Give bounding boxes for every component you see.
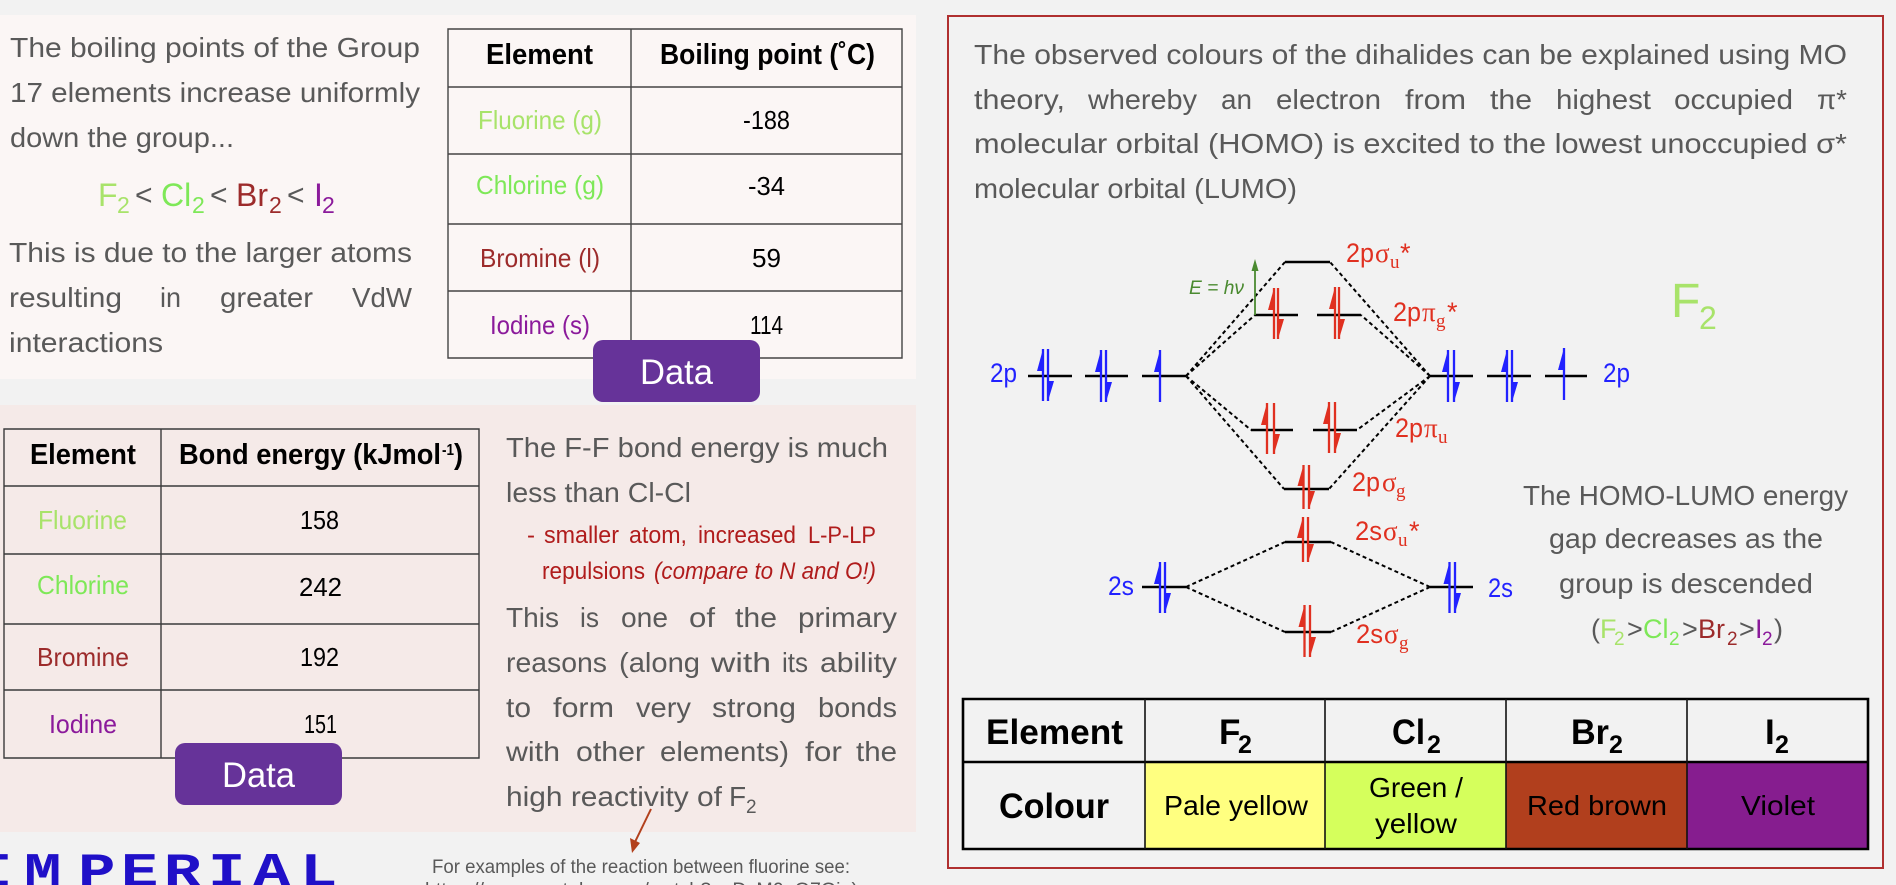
text: high reactivity reasons: elements) <box>660 736 789 767</box>
text: repulsion note: increased <box>698 522 796 549</box>
text: high reactivity reasons: with <box>505 736 560 767</box>
labels: molecular orbitals: 2p <box>1352 467 1380 497</box>
text: high reactivity reasons: bonds <box>818 692 897 723</box>
labels: molecular orbitals: * <box>1400 238 1411 268</box>
text: VdW explanation <box>9 237 413 358</box>
labels: molecular orbitals <box>1346 238 1458 654</box>
text: high reactivity reasons: strong <box>712 692 796 723</box>
labels: molecular orbitals: g <box>1396 481 1406 502</box>
arrow: excitation <box>1189 259 1258 315</box>
labels: molecular orbitals: π <box>1424 413 1438 443</box>
labels: molecular orbitals: u <box>1390 252 1400 273</box>
table: bond energies <box>4 429 479 758</box>
text: HOMO-LUMO gap: The HOMO-LUMO energy <box>1523 480 1848 511</box>
text: high reactivity reasons: F <box>729 781 746 812</box>
text: MO explanation: π* <box>1817 84 1847 115</box>
text: HOMO-LUMO gap: gap decreases as the <box>1549 523 1823 554</box>
text: HOMO-LUMO gap: > <box>1739 614 1755 644</box>
table: boiling points: Fluorine (g) <box>478 105 602 135</box>
correlation lines <box>1186 262 1430 632</box>
chart: MO diagram for F2 <box>990 238 1630 657</box>
table: boiling points: Element <box>486 39 593 71</box>
text: video reference: For examples of the reaction between fluorine see: <box>432 857 850 878</box>
table: boiling points: Iodine (s) <box>490 310 590 340</box>
text: MO explanation: molecular orbital (LUMO) <box>974 173 1297 204</box>
text: MO explanation: the <box>1490 84 1532 115</box>
table: dihalide colours: F <box>1219 713 1240 752</box>
table: dihalide colours: 2 <box>1775 731 1789 759</box>
text: HOMO-LUMO gap: > <box>1627 614 1643 644</box>
text: MO explanation: molecular orbital (HOMO) is excited to the lowest unoccupied σ* <box>974 128 1847 159</box>
table: boiling points: -188 <box>743 105 790 135</box>
text: repulsion note: smaller <box>544 522 619 549</box>
text: boiling point trend <box>10 32 420 153</box>
arrow: to video link <box>630 809 651 853</box>
text: MO explanation <box>974 39 1847 204</box>
table: bond energies: Bromine <box>37 642 129 672</box>
red electrons <box>1261 287 1345 657</box>
button: data (boiling points): Data <box>640 353 714 392</box>
formula: boiling point order: Br <box>236 177 268 213</box>
table: bond energies: -1 <box>442 442 454 459</box>
text: high reactivity reasons <box>505 602 897 818</box>
text: high reactivity reasons: high reactivity of <box>506 781 722 812</box>
text: MO explanation: an <box>1221 84 1252 115</box>
formula: boiling point order: 2 <box>192 192 205 218</box>
text: HOMO-LUMO gap: group is descended <box>1559 568 1813 599</box>
table: boiling points <box>448 29 902 358</box>
table: dihalide colours: Violet <box>1741 790 1815 821</box>
labels: molecular orbitals: π <box>1422 297 1436 327</box>
panel: bond energy <box>0 405 916 832</box>
labels: molecular orbitals: σ <box>1383 516 1398 546</box>
table: dihalide colours: 2 <box>1238 731 1252 759</box>
text: high reactivity reasons: very <box>636 692 691 723</box>
text: VdW explanation: interactions <box>9 327 163 358</box>
text: high reactivity reasons: of <box>689 602 715 633</box>
energy levels <box>1028 262 1587 632</box>
labels: molecular orbitals: g <box>1436 311 1446 332</box>
labels: molecular orbitals: 2p <box>1346 238 1374 268</box>
table: dihalide colours <box>963 699 1868 849</box>
text: repulsion note: repulsions <box>542 558 645 585</box>
text: high reactivity reasons: for <box>805 736 842 767</box>
table: bond energies: Fluorine <box>38 505 127 535</box>
heading: F2: F <box>1671 275 1700 328</box>
text: VdW explanation: in <box>160 282 181 313</box>
heading: F2: 2 <box>1699 300 1717 336</box>
text: boiling point trend: 17 elements increase uniformly <box>10 77 420 108</box>
table: boiling points: Boiling point (˚C) <box>660 39 875 71</box>
text: MO explanation: occupied <box>1674 84 1793 115</box>
text: high reactivity reasons: This <box>506 602 559 633</box>
text: repulsion note: atom, <box>629 522 687 549</box>
labels: atomic orbitals: 2p <box>990 358 1017 388</box>
text: high reactivity reasons: primary <box>798 602 897 633</box>
formula: boiling point order: 2 <box>322 192 335 218</box>
labels: molecular orbitals: * <box>1409 516 1420 546</box>
text: HOMO-LUMO gap: 2 <box>1762 629 1773 650</box>
text: HOMO-LUMO gap: Br <box>1698 614 1725 644</box>
text: repulsion note <box>527 522 876 585</box>
table: boiling points: 59 <box>752 243 781 273</box>
table: dihalide colours: Br <box>1571 713 1609 752</box>
text: high reactivity reasons: ability <box>820 647 897 678</box>
blue electrons <box>1037 348 1564 613</box>
text: MO explanation: theory, <box>974 84 1065 115</box>
text: HOMO-LUMO gap: Cl <box>1643 614 1668 644</box>
text: HOMO-LUMO gap: 2 <box>1614 629 1625 650</box>
formula: boiling point order: < <box>210 179 228 212</box>
text: MO explanation: The observed colours of the dihalides can be explained using MO <box>974 39 1847 70</box>
table: bond energies: Iodine <box>49 709 117 739</box>
table: boiling points: Bromine (l) <box>480 243 600 273</box>
table: boiling points: Chlorine (g) <box>476 170 604 200</box>
labels: molecular orbitals: 2p <box>1393 297 1421 327</box>
text: repulsion note: - <box>527 522 535 549</box>
table: dihalide colours: yellow <box>1375 808 1458 839</box>
table: dihalide colours: Cl <box>1392 713 1425 752</box>
labels: molecular orbitals: 2s <box>1356 619 1383 649</box>
text: MO explanation: electron <box>1276 84 1381 115</box>
labels: molecular orbitals: σ <box>1382 467 1397 497</box>
table: dihalide colours: Pale yellow <box>1164 790 1309 821</box>
text: high reactivity reasons: with <box>710 647 771 678</box>
text: VdW explanation: VdW <box>352 282 413 313</box>
text: high reactivity reasons: the <box>856 736 897 767</box>
formula: boiling point order: Cl <box>161 177 191 213</box>
table: boiling points: 114 <box>750 310 783 340</box>
labels: atomic orbitals: 2s <box>1488 573 1513 603</box>
labels: molecular orbitals: g <box>1399 633 1409 654</box>
text: HOMO-LUMO gap: ( <box>1591 614 1600 644</box>
text: MO explanation: from <box>1405 84 1466 115</box>
formula: boiling point order: < <box>287 179 305 212</box>
text: HOMO-LUMO gap <box>1523 480 1848 650</box>
arrow: excitation: E = hν <box>1189 278 1244 299</box>
labels: molecular orbitals: σ <box>1375 238 1390 268</box>
formula: boiling point order: F <box>98 177 118 213</box>
table: dihalide colours: 2 <box>1609 731 1623 759</box>
formula: boiling point order: 2 <box>117 192 130 218</box>
text: high reactivity reasons: the <box>735 602 777 633</box>
labels: atomic orbitals <box>990 358 1630 603</box>
text: high reactivity reasons: reasons <box>506 647 607 678</box>
table: bond energies: 151 <box>304 709 337 739</box>
text: boiling point trend: The boiling points of the Group <box>10 32 420 63</box>
labels: molecular orbitals: u <box>1438 427 1448 448</box>
text: high reactivity reasons: its <box>782 647 808 678</box>
table: dihalide colours: Green / <box>1369 772 1463 803</box>
text: HOMO-LUMO gap: > <box>1682 614 1698 644</box>
table: bond energies: 192 <box>300 642 339 672</box>
text: VdW explanation: resulting <box>9 282 122 313</box>
labels: molecular orbitals: 2s <box>1355 516 1382 546</box>
button: data (bond energy): Data <box>222 756 296 795</box>
text: HOMO-LUMO gap: I <box>1755 614 1763 644</box>
panel: MO theory <box>948 16 1883 868</box>
labels: atomic orbitals: 2s <box>1108 571 1134 601</box>
text: F-F bond energy: less than Cl-Cl <box>506 477 691 508</box>
table: bond energies: Element <box>30 439 136 471</box>
text: MO explanation: whereby <box>1087 84 1197 115</box>
panel: boiling points <box>0 15 916 379</box>
text: high reactivity reasons: form <box>553 692 614 723</box>
text: high reactivity reasons: one <box>621 602 668 633</box>
text: MO explanation: highest <box>1556 84 1651 115</box>
text: HOMO-LUMO gap: 2 <box>1727 629 1738 650</box>
table: dihalide colours: Element <box>986 713 1123 752</box>
table: dihalide colours: Red brown <box>1527 790 1667 821</box>
text: high reactivity reasons: other <box>576 736 645 767</box>
text: F-F bond energy <box>506 432 888 508</box>
table: dihalide colours: Colour <box>999 787 1109 826</box>
table: boiling points: -34 <box>748 171 785 201</box>
text: VdW explanation: greater <box>220 282 313 313</box>
table: bond energies: Chlorine <box>37 570 129 600</box>
labels: molecular orbitals: 2p <box>1395 413 1423 443</box>
formula: boiling point order: I <box>314 177 323 213</box>
text: HOMO-LUMO gap: F <box>1600 614 1616 644</box>
text: HOMO-LUMO gap: ) <box>1774 614 1783 644</box>
text: high reactivity reasons: to <box>506 692 531 723</box>
labels: molecular orbitals: σ <box>1384 619 1399 649</box>
text: repulsion note: (compare to N and O!) <box>654 558 876 585</box>
labels: atomic orbitals: 2p <box>1603 358 1630 388</box>
formula: boiling point order: 2 <box>269 192 282 218</box>
table: bond energies: Bond energy (kJmol <box>179 439 441 471</box>
table: dihalide colours: I <box>1765 713 1775 752</box>
text: high reactivity reasons: (along <box>619 647 700 678</box>
table: dihalide colours: 2 <box>1427 731 1441 759</box>
text: F-F bond energy: The F-F bond energy is much <box>506 432 888 463</box>
labels: molecular orbitals: u <box>1398 530 1408 551</box>
text: high reactivity reasons: is <box>580 602 599 633</box>
text: high reactivity reasons: 2 <box>746 797 757 818</box>
table: bond energies: 242 <box>299 572 342 602</box>
formula: boiling point order <box>98 177 335 218</box>
button: data (bond energy) <box>175 743 342 805</box>
text: boiling point trend: down the group... <box>10 122 234 153</box>
text: repulsion note: L-P-LP <box>808 522 876 549</box>
table: bond energies: ) <box>454 439 463 471</box>
heading: F2 <box>1671 275 1717 336</box>
table: bond energies: 158 <box>300 505 339 535</box>
text: HOMO-LUMO gap: 2 <box>1669 629 1680 650</box>
formula: boiling point order: < <box>135 179 153 212</box>
text: VdW explanation: This is due to the larger atoms <box>9 237 412 268</box>
labels: molecular orbitals: * <box>1447 297 1458 327</box>
button: data (boiling points) <box>593 340 760 402</box>
